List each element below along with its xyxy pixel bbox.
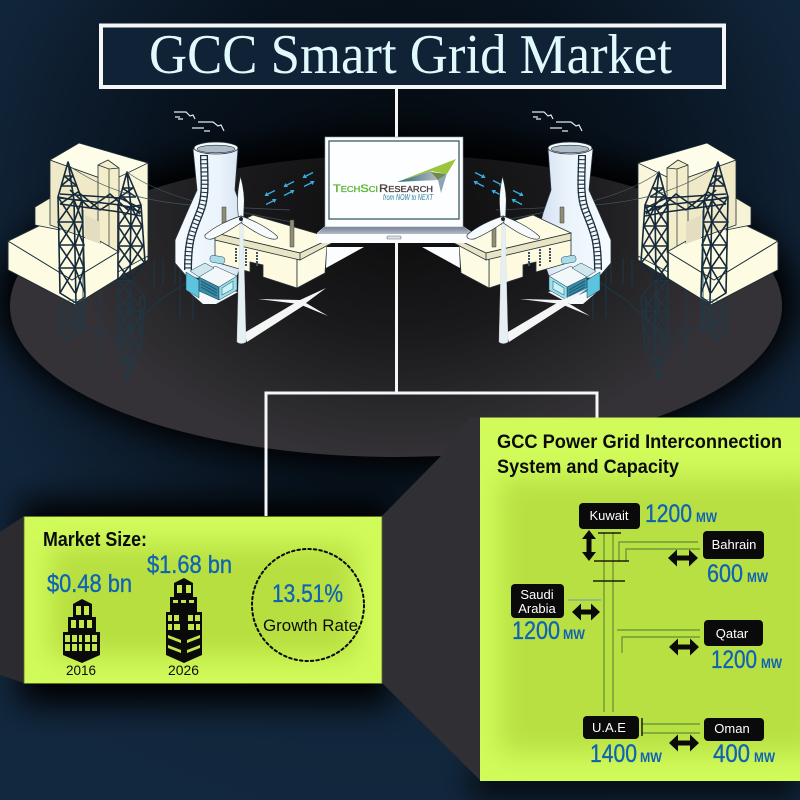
country: Oman: [704, 718, 776, 768]
double arrows: [572, 530, 699, 752]
country: Bahrain: [703, 531, 769, 588]
country: Oman: MW: [754, 749, 776, 765]
laptop screen: [325, 137, 463, 227]
title text: GCC Smart Grid Market: [149, 24, 672, 86]
logo mark: [397, 159, 456, 193]
laptop base: [317, 226, 473, 243]
country: Bahrain: Bahrain: [712, 537, 756, 552]
country: U.A.E: MW: [640, 749, 663, 765]
country: Oman: 400: [713, 740, 750, 768]
growth label: Growth Rate: [263, 616, 358, 635]
country: U.A.E: U.A.E: [592, 720, 626, 735]
illustration: left power site: [8, 142, 364, 379]
country: U.A.E: 1400: [590, 740, 637, 768]
country: Saudi Arabia: Saudi: [520, 587, 554, 602]
country: Saudi Arabia: Arabia: [518, 601, 557, 616]
panel inner shade: [500, 478, 800, 753]
grid lines: [568, 532, 700, 736]
icon: building 2026: [166, 578, 202, 663]
icon: building 2016: [63, 599, 100, 663]
right wind turbine: [467, 176, 590, 344]
title: [101, 24, 724, 87]
growth value: 13.51%: [272, 580, 343, 608]
left wind arrows: [264, 172, 314, 204]
left smoke: [174, 112, 224, 131]
label 2026: 2026: [168, 662, 199, 678]
heading line 2: System and Capacity: [497, 457, 679, 478]
panel: interconnection: [480, 418, 800, 781]
left wind turbine: [205, 176, 328, 344]
right smoke: [532, 112, 582, 131]
country: Qatar: [704, 620, 783, 674]
country: Saudi Arabia: 1200: [512, 617, 560, 645]
connector lines: [266, 88, 597, 516]
panel background: [24, 516, 382, 684]
country: Qatar: 1200: [711, 646, 757, 674]
dark ground ellipse: [10, 155, 782, 457]
growth rate circle: [252, 549, 364, 661]
country: Bahrain: MW: [747, 569, 769, 585]
country: Kuwait: MW: [696, 509, 718, 525]
heading: Market Size:: [43, 529, 147, 551]
panel shadow shape: [382, 417, 480, 780]
value 2016: $0.48 bn: [47, 570, 132, 598]
country: Oman: Oman: [714, 721, 750, 736]
panel: market size: [24, 516, 382, 684]
country: Bahrain: 600: [707, 560, 743, 588]
illustration: right power site: [422, 142, 778, 379]
heading line 1: GCC Power Grid Interconnection: [497, 432, 782, 453]
country: Kuwait: Kuwait: [589, 508, 629, 523]
laptop with logo: [317, 137, 473, 243]
country: Kuwait: [579, 500, 718, 529]
panel background: [480, 418, 800, 781]
country: U.A.E: [583, 716, 663, 768]
country: Saudi Arabia: MW: [563, 626, 586, 642]
label 2016: 2016: [66, 662, 96, 678]
country: Qatar: Qatar: [716, 626, 749, 641]
logo text: TechSci: [333, 183, 378, 195]
country: Saudi Arabia: [511, 584, 586, 645]
value 2026: $1.68 bn: [147, 551, 232, 579]
country: Kuwait: 1200: [645, 500, 692, 528]
laptop with logo: Research: [379, 183, 433, 195]
logo tagline: from NOW to NEXT: [383, 192, 434, 202]
country: Qatar: MW: [761, 655, 783, 671]
left panel shadow: [0, 516, 24, 683]
title frame: [101, 26, 724, 87]
panel inner shade: [50, 545, 355, 657]
right wind arrows: [474, 172, 524, 204]
